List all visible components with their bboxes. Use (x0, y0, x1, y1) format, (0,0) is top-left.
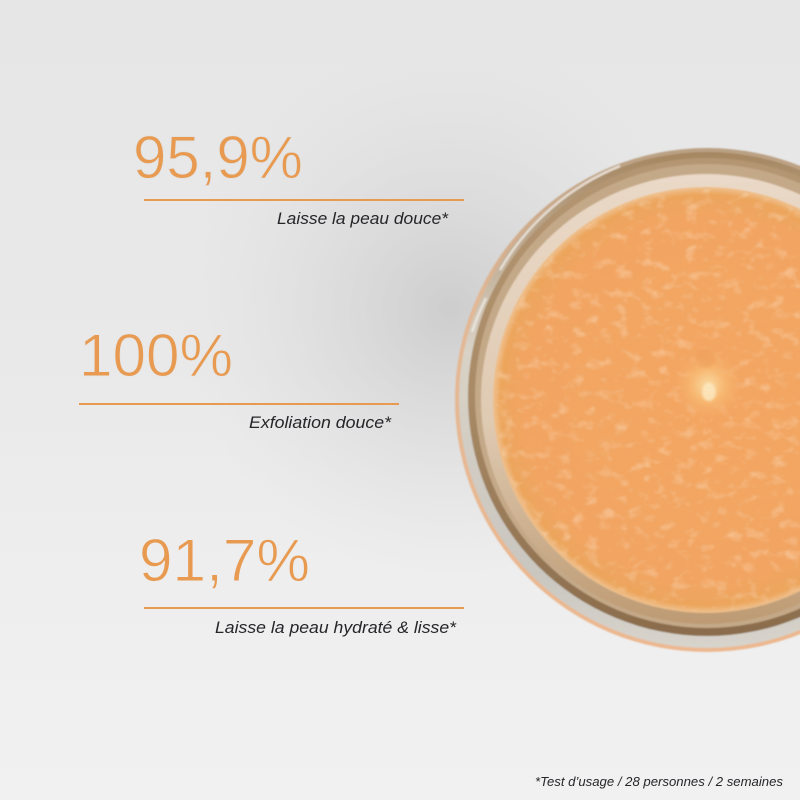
rule (79, 403, 399, 405)
value: 91,7% (139, 527, 310, 594)
label: Laisse la peau hydraté & lisse* (215, 619, 457, 637)
stat 3: 91,7% (139, 527, 464, 637)
stat 2: 100% (79, 322, 399, 432)
infographic canvas (79, 90, 800, 788)
value: 95,9% (133, 124, 303, 191)
jar: puree surface (490, 185, 800, 615)
stat 1: 95,9% (133, 124, 464, 228)
rule (144, 199, 464, 201)
rule (144, 607, 464, 609)
label: Exfoliation douce* (249, 414, 392, 432)
label: Laisse la peau douce* (277, 210, 449, 228)
jar of orange puree (455, 148, 800, 652)
value: 100% (79, 322, 233, 389)
footnote: *Test d’usage / 28 personnes / 2 semaines (535, 775, 783, 789)
jar: outer glass rim (455, 148, 800, 652)
